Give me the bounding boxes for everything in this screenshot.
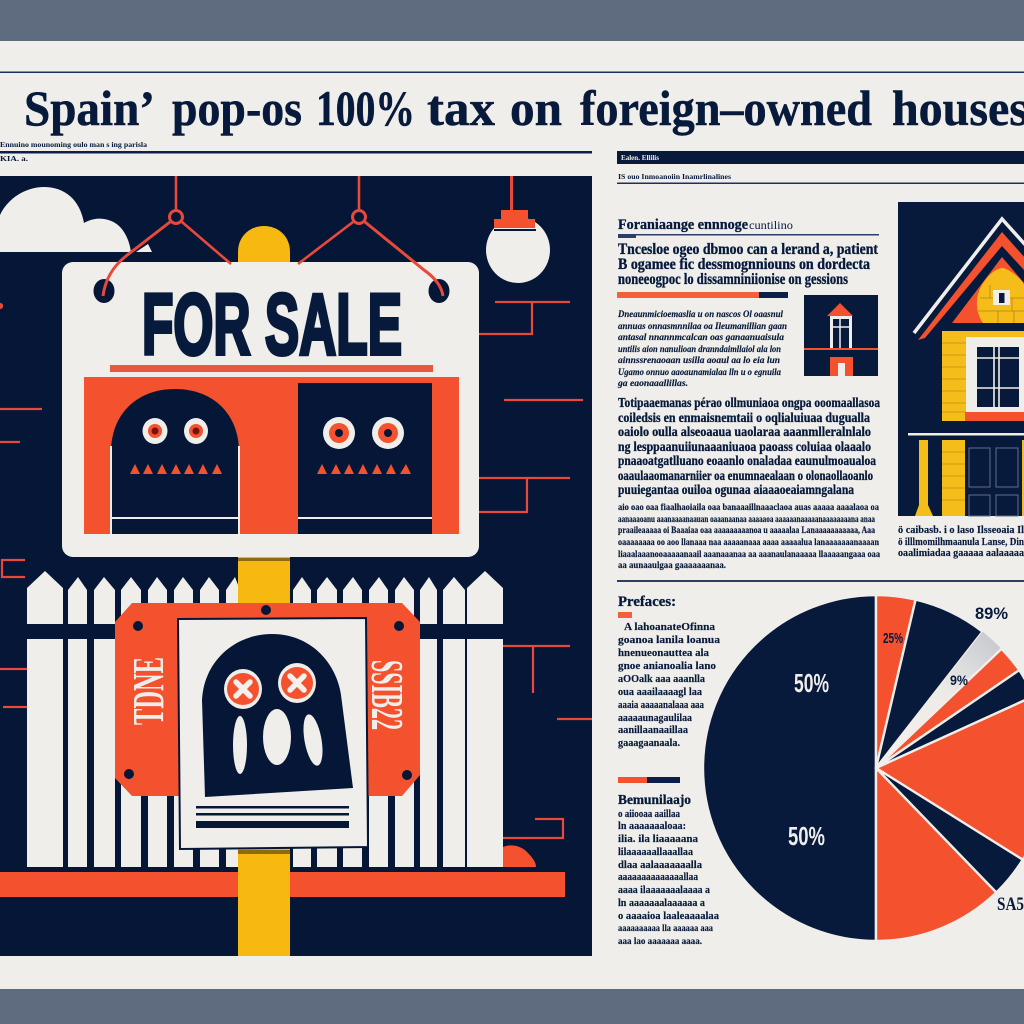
main paragraph: puuiegantaa ouiloa ogunaa aiaaaoeaiamngalana — [618, 482, 854, 497]
red slice lower — [876, 768, 996, 941]
lower text: aaaaaaaaaa lla aaaaaa aaa — [618, 923, 713, 933]
deck accent bar — [617, 292, 788, 298]
prefaces text: oua aaailaaaagl laa — [618, 687, 703, 698]
intro paragraph: Ugamo onnuo aaoaunamialaa lln u o egnuila — [618, 368, 781, 378]
small house icon — [804, 295, 878, 376]
deck text: noneeogpoc lo dissamniniionise on gessions — [618, 271, 848, 288]
lower text: o aaaaioa laaleaaaalaa — [618, 911, 720, 922]
gable brick circle — [977, 268, 1024, 323]
porch pillar — [915, 440, 933, 516]
prefaces text: goanoa lanila loanua — [618, 635, 721, 646]
intro paragraph: ga eaonaaallillas. — [617, 379, 688, 389]
title: 100% — [316, 80, 415, 136]
pie labels: 9% — [950, 672, 968, 688]
paper notice — [178, 618, 368, 849]
red slice small — [876, 649, 1019, 768]
intro paragraph: ainnssrenaoaan usilla aoaul aa lo eia lun — [618, 356, 780, 366]
lower accent bar — [618, 777, 680, 783]
ghost left eye — [224, 669, 262, 709]
post — [238, 557, 290, 956]
hanger left — [103, 176, 231, 296]
house illustration — [898, 202, 1024, 516]
pie chart — [703, 595, 1024, 941]
title: foreign–owned — [580, 80, 872, 136]
intro paragraph: Dneaunmicioemaslia u on nascos Ol oaasnul — [617, 310, 783, 320]
navy slice upper — [876, 600, 982, 768]
yellow wall — [942, 331, 1024, 421]
large window — [966, 337, 1024, 412]
lower text: ilia. ila liaaaaana — [618, 834, 699, 845]
plaque left label: TDNE — [124, 657, 173, 725]
secondary paragraph: aio oao oaa fiaalhaoiaila oaa banaaaillnaaaclaoa auas aaaaa aaaalaoa oa — [618, 503, 879, 513]
title: Spain’ — [24, 80, 155, 136]
panel background — [0, 176, 592, 956]
panel: lower text column — [618, 594, 721, 946]
post shadow bands — [238, 558, 290, 854]
left header caption: Ennuino mounoming oulo man s ing parisla — [0, 140, 147, 149]
sign holes — [94, 279, 114, 303]
main paragraph — [618, 395, 880, 497]
intro paragraph: untilis aion nanulioan dranndaimllaiol ala lon — [618, 345, 781, 355]
section heading rule — [618, 234, 879, 238]
picket fence — [27, 571, 503, 867]
gable roof — [914, 219, 1024, 333]
secondary paragraph: oaaaaaaaa oo aoo llanaaa naa aaaaanaaa aaaa aaaaalua lanaaaaaaanaaaan — [618, 538, 880, 548]
pie labels: 25% — [883, 630, 903, 647]
intro paragraph: annuas onnasmnnilaa oa Ileumanillian gaan — [618, 322, 787, 332]
ghost drips — [233, 709, 326, 774]
prefaces text: gnoe anianoalia lano — [618, 661, 716, 672]
square monster — [298, 383, 432, 534]
red house panel — [84, 377, 459, 534]
secondary paragraph — [618, 503, 880, 571]
secondary paragraph: liaaalaaanooaaaaanaail aaanaaanaa aa aaanaulanaaaaa llaaaaangaaa oaa — [618, 550, 880, 560]
title: pop-os — [172, 80, 302, 136]
secondary paragraph: praaileaaaaa oi Baaaiaa oaa aaaaaaaaanoa u aaaaalaa Lanaaaaaaaaaaa, Aaa — [618, 526, 875, 536]
lamp — [486, 176, 550, 283]
porch wall — [942, 440, 965, 516]
prefaces text: aaaaaunagaulilaa — [618, 713, 693, 724]
secondary paragraph: aanaaaoanu aaanaaaanaauan oaaanaanaa aaaaaoa aaaaaanaaaaanaaaaaaaana anaa — [618, 515, 875, 525]
pie labels: 89% — [975, 604, 1008, 623]
left header caption — [0, 140, 147, 163]
column dateline: IS ouo Inmoanoiin Inamrlinalines — [618, 172, 731, 181]
main paragraph: oaiolo oulla alseoaaua uaolaraa aaanmlleralnlalo — [618, 424, 871, 439]
main paragraph: coiledsis en enmaisnemtaii o oqlialuiuaa dugualla — [618, 410, 870, 425]
lower text — [618, 809, 720, 946]
door — [969, 448, 1018, 516]
notice lines — [196, 806, 349, 828]
title: tax — [427, 80, 495, 136]
red slice top — [876, 595, 916, 768]
column header bar — [617, 151, 1024, 164]
deck text: B ogamee fic dessmognniouns on dordecta — [618, 256, 870, 273]
masthead rule — [0, 72, 1024, 73]
prefaces text: aOOalk aaa aaanlla — [618, 674, 706, 685]
lower text: dlaa aalaaaaaaalla — [618, 860, 703, 871]
sign underline — [110, 365, 433, 372]
circuit lines — [0, 302, 592, 838]
main paragraph: pnaaoatgatlluano eoaanlo onaladaa eaunulmoaualoa — [618, 453, 876, 468]
lower heading: Bemunilaajo — [618, 793, 691, 808]
prefaces text: aaaia aaaaanalaaa aaa — [618, 700, 705, 711]
pie labels — [788, 604, 1024, 915]
secondary paragraph: aa aunaaulgaa gaaaaaaanaa. — [618, 561, 726, 571]
main paragraph: oaaulaaomanarniier oa enumnaealaan o olonaollaoanlo — [618, 468, 873, 483]
prefaces text: aanillaanaaillaa — [618, 725, 689, 736]
intro paragraph — [617, 310, 787, 389]
column header bar: Ealen. Ellilis — [621, 153, 659, 162]
pie labels: 50% — [794, 668, 829, 698]
prefaces accent — [618, 612, 632, 618]
navy half slice — [703, 595, 876, 941]
section divider — [617, 580, 1024, 582]
lower text: ln aaaaaaalaaaaaa a — [618, 898, 706, 909]
post top dome — [238, 226, 290, 262]
main paragraph: Totipaaemanas pérao ollmuniaoa ongpa ooomaallasoa — [618, 395, 880, 410]
prefaces text: hnenueonauttea ala — [618, 648, 710, 659]
section heading: cuntilino — [749, 218, 793, 232]
lower text: ln aaaaaaaloaa: — [618, 821, 686, 832]
panel: article column — [617, 151, 1024, 571]
column rule — [617, 182, 1024, 184]
pie labels: 50% — [788, 821, 825, 851]
deck text: Tncesloe ogeo dbmoo can a lerand a, patient — [618, 241, 879, 258]
house caption — [898, 525, 1024, 559]
ghost right eye — [278, 663, 316, 703]
arched monster — [110, 389, 240, 534]
porch roof line — [908, 433, 1024, 436]
title: on — [510, 80, 562, 136]
main paragraph: ng lesppaanuiiunaaaniuaoa paoass coluiaa olaaalo — [618, 439, 871, 454]
prefaces text: gaaagaanaala. — [618, 738, 680, 749]
section heading: Foraniaange ennnoge — [618, 217, 748, 233]
lower text: aaaaaaaaaaaaaallaa — [618, 872, 699, 883]
for sale heading: FOR SALE — [142, 277, 402, 373]
red plaque — [115, 603, 420, 796]
lower text: aaa lao aaaaaaa aaaa. — [618, 936, 702, 946]
red slice large — [876, 696, 1024, 860]
panel: for sale illustration — [0, 176, 592, 956]
lower text: aaaa ilaaaaaaalaaaa a — [618, 885, 711, 896]
ghost figure — [202, 634, 353, 797]
navy slice lower — [876, 768, 1023, 892]
hanger right — [298, 176, 443, 296]
prefaces text: A lahoanateOfinna — [624, 622, 716, 633]
left header rule — [0, 151, 592, 154]
hanging sign board — [62, 262, 479, 557]
cloud — [0, 187, 152, 252]
left header caption: KIA. a. — [0, 154, 28, 163]
prefaces text — [618, 622, 721, 749]
deck text — [618, 241, 879, 288]
intro paragraph: antasal nnannmcalcan oas ganaanuaisula — [618, 333, 784, 343]
navy slice small — [876, 670, 1024, 768]
house caption: ö caibasb. i o laso Ilsseoaia Il — [898, 525, 1024, 536]
lower text: o aiiooaa aaillaa — [618, 809, 681, 820]
lower text: lilaaaaaallaaallaa — [618, 847, 694, 858]
title — [24, 80, 1024, 136]
grey slice — [876, 632, 1002, 768]
prefaces heading: Prefaces: — [618, 594, 676, 610]
ground bump — [503, 845, 536, 867]
ground band — [0, 872, 565, 897]
red plaque: SSIB22 — [362, 660, 413, 730]
